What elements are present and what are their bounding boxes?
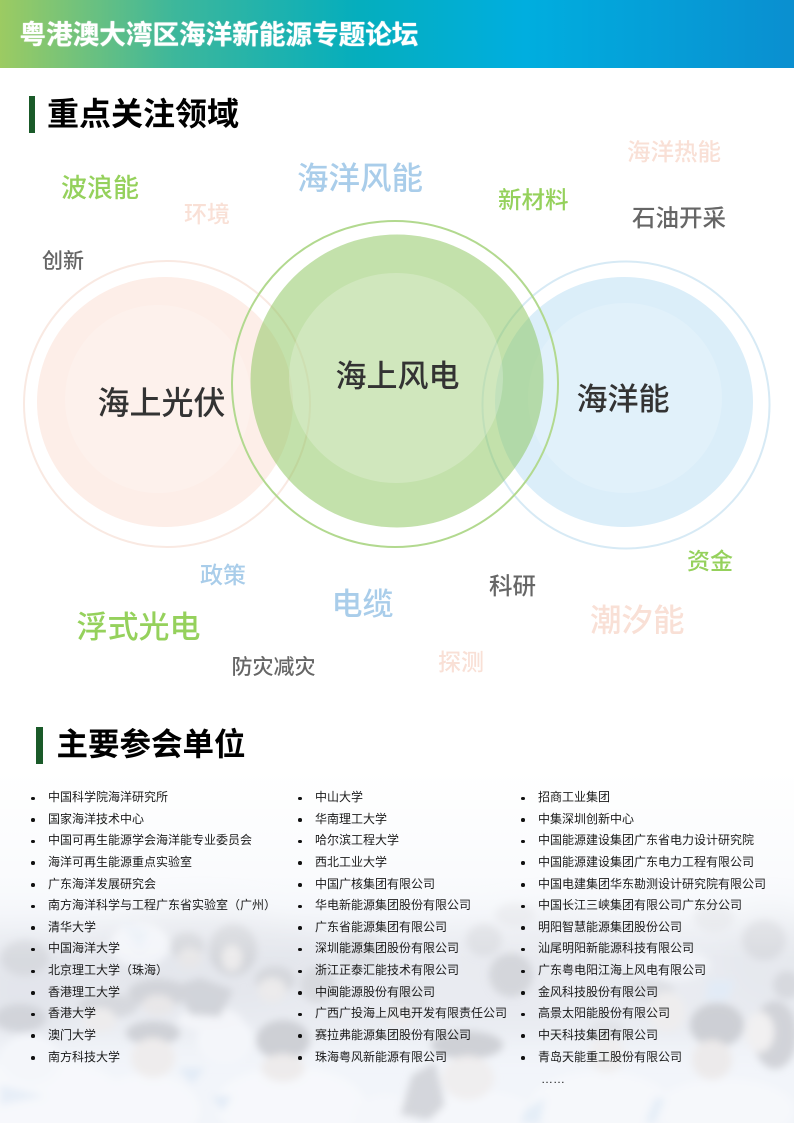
- list: column 2: 中闽能源股份有限公司: [315, 985, 435, 999]
- list: column 1: 澳门大学: [48, 1028, 96, 1042]
- list: column 3: 汕尾明阳新能源科技有限公司: [538, 941, 694, 955]
- keyword: 科研: [489, 573, 536, 599]
- keyword: 电缆: [332, 587, 394, 622]
- list: column 1: 中国海洋大学: [48, 941, 120, 955]
- list: column 2: 赛拉弗能源集团股份有限公司: [315, 1028, 471, 1042]
- list: column 3: 明阳智慧能源集团股份公司: [538, 920, 682, 934]
- list: column 2: [298, 790, 507, 1064]
- heading: focus areas: [29, 96, 239, 133]
- heading accent bar: [29, 96, 35, 133]
- list: column 3: 金风科技股份有限公司: [538, 985, 658, 999]
- keyword: 海洋热能: [627, 139, 721, 165]
- dark hair and clothes: [177, 978, 233, 1017]
- venn diagram: [23, 220, 770, 550]
- label: offshore PV: 海上光伏: [98, 385, 226, 421]
- list: column 3: 中集深圳创新中心: [538, 812, 634, 826]
- heading text: 重点关注领域: [47, 96, 239, 132]
- list: column 1: 清华大学: [48, 920, 96, 934]
- list: column 1: 中国可再生能源学会海洋能专业委员会: [48, 833, 252, 847]
- label: offshore wind: 海上风电: [336, 358, 460, 394]
- list: column 2: 深圳能源集团股份有限公司: [315, 941, 459, 955]
- list: column 1: [31, 790, 276, 1064]
- keyword: 浮式光电: [76, 610, 200, 645]
- circle: ocean energy: [482, 262, 770, 548]
- background: conference crowd photo: [0, 894, 794, 1123]
- circle: offshore wind: [232, 221, 558, 547]
- keyword: 创新: [42, 250, 84, 273]
- list: column 2: 珠海粤风新能源有限公司: [315, 1050, 447, 1064]
- heading: main participants: [36, 726, 246, 764]
- list: column 3: 高景太阳能股份有限公司: [538, 1006, 670, 1020]
- list: column 3: [521, 790, 766, 1064]
- title: 粤港澳大湾区海洋新能源专题论坛: [20, 20, 418, 50]
- list: column 3: 中国长江三峡集团有限公司广东分公司: [538, 898, 742, 912]
- list: column 1: 中国科学院海洋研究所: [48, 790, 168, 804]
- list: column 3: 中国电建集团华东勘测设计研究院有限公司: [538, 876, 766, 890]
- keyword: 资金: [687, 548, 733, 574]
- list: column 2: 广东省能源集团有限公司: [315, 920, 447, 934]
- list: column 1: 南方科技大学: [48, 1050, 120, 1064]
- list: column 3: 中国能源建设集团广东电力工程有限公司: [538, 855, 754, 869]
- keyword: 波浪能: [61, 173, 139, 203]
- circle: offshore PV: [24, 261, 310, 547]
- list: column 2: 中山大学: [315, 790, 363, 804]
- faces: [131, 1038, 175, 1078]
- list: column 2: 广西广投海上风电开发有限责任公司: [315, 1006, 507, 1020]
- list: column 2: 中国广核集团有限公司: [315, 876, 435, 890]
- list: column 1: 南方海洋科学与工程广东省实验室（广州）: [48, 898, 276, 912]
- heading text: 主要参会单位: [56, 726, 246, 762]
- keyword: 海洋风能: [297, 160, 423, 196]
- list: column 3: 中国能源建设集团广东省电力设计研究院: [538, 833, 754, 847]
- blue gaps: [178, 1068, 205, 1084]
- list: column 1: 广东海洋发展研究会: [48, 876, 156, 890]
- list: column 1: 香港大学: [48, 1006, 96, 1020]
- list: column 3: 广东粤电阳江海上风电有限公司: [538, 963, 706, 977]
- white shirts: [0, 1058, 125, 1123]
- list: column 1: 国家海洋技术中心: [48, 812, 144, 826]
- heading accent bar: [36, 727, 43, 764]
- list: ellipsis: ……: [541, 1072, 565, 1086]
- list: column 2: 华电新能源集团股份有限公司: [315, 898, 471, 912]
- list: column 3: 青岛天能重工股份有限公司: [538, 1050, 682, 1064]
- keyword: 环境: [184, 200, 230, 226]
- title banner: [0, 0, 794, 68]
- list: column 1: 北京理工大学（珠海）: [48, 963, 168, 977]
- keyword: 防灾减灾: [232, 656, 316, 679]
- keyword: 潮汐能: [590, 602, 685, 638]
- keyword: 探测: [438, 649, 484, 675]
- keyword: 政策: [200, 562, 246, 588]
- list: column 2: 西北工业大学: [315, 855, 387, 869]
- list: column 2: 华南理工大学: [315, 812, 387, 826]
- keyword: 新材料: [498, 187, 568, 213]
- list: column 2: 浙江正泰汇能技术有限公司: [315, 963, 459, 977]
- list: column 3: 中天科技集团有限公司: [538, 1028, 658, 1042]
- list: column 1: 香港理工大学: [48, 985, 120, 999]
- label: ocean energy: 海洋能: [576, 382, 670, 417]
- keyword: 石油开采: [632, 205, 726, 231]
- list: column 2: 哈尔滨工程大学: [315, 833, 399, 847]
- list: column 3: 招商工业集团: [538, 790, 610, 804]
- list: column 1: 海洋可再生能源重点实验室: [48, 855, 192, 869]
